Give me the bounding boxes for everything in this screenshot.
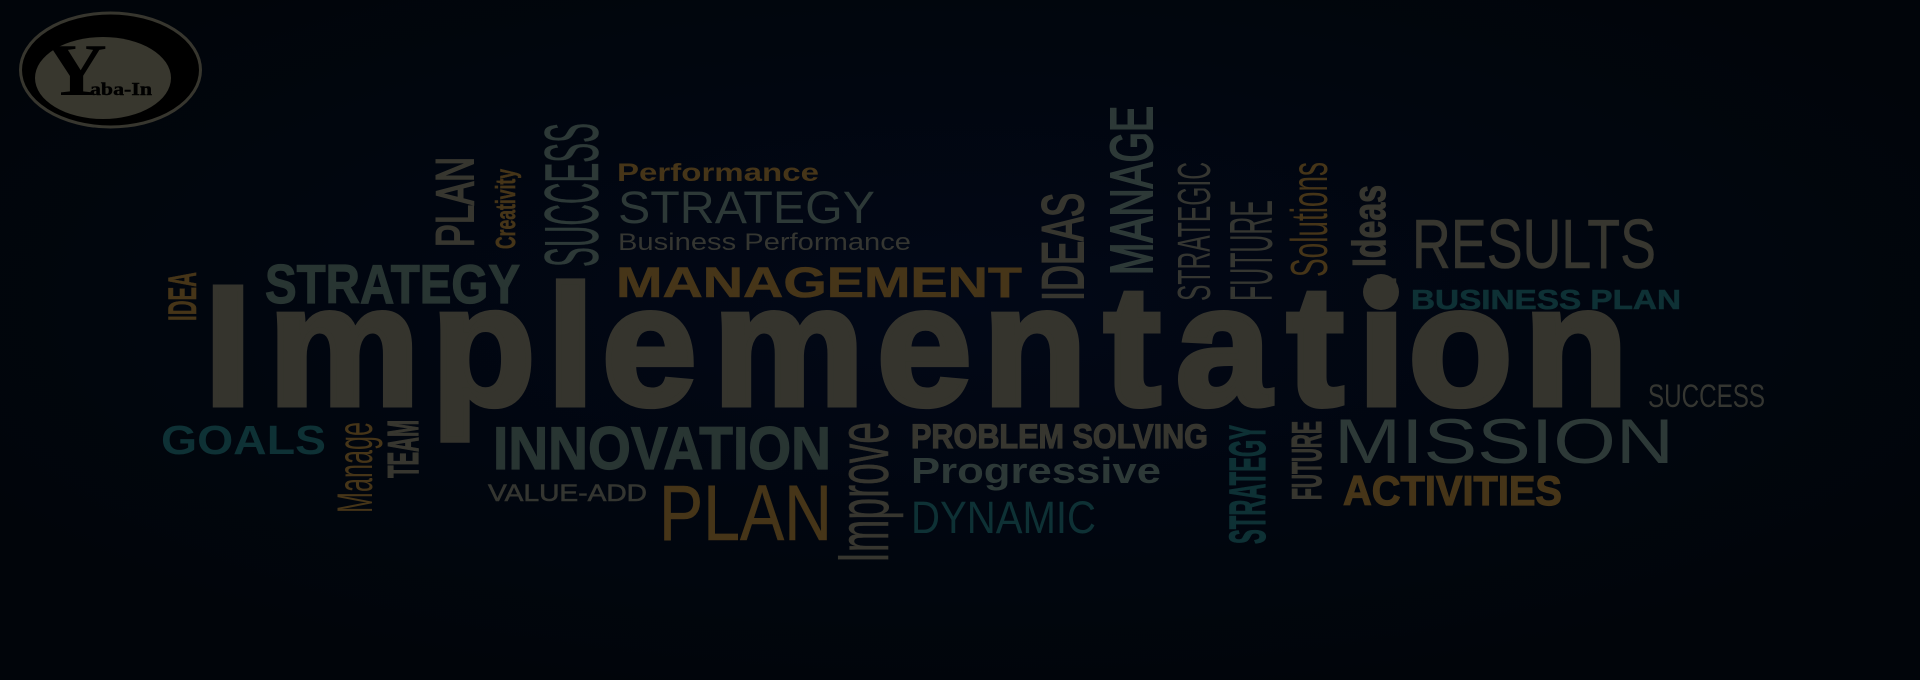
word: PLAN brown: PLAN — [659, 468, 832, 557]
word: INNOVATION: INNOVATION — [493, 415, 831, 482]
word: DYNAMIC: DYNAMIC — [911, 492, 1096, 543]
word: Improve vertical: Improve — [824, 422, 904, 563]
word: IDEA vertical: IDEA — [161, 272, 205, 321]
word: Ideas vertical: Ideas — [1343, 185, 1395, 267]
word: Progressive: Progressive — [911, 450, 1161, 491]
word: Performance: Performance — [617, 159, 819, 187]
word: BUSINESS PLAN: BUSINESS PLAN — [1411, 284, 1681, 315]
word: MISSION: MISSION — [1334, 407, 1674, 477]
word: IDEAS vertical: IDEAS — [1031, 193, 1096, 301]
logo: Yaba-In — [20, 13, 200, 127]
logo: Yaba-In: Y — [45, 30, 107, 112]
word: STRATEGY light: STRATEGY — [618, 182, 875, 233]
word: Manage vertical: Manage — [327, 422, 383, 513]
word: GOALS: GOALS — [161, 417, 326, 463]
word: ACTIVITIES: ACTIVITIES — [1343, 467, 1562, 514]
word: RESULTS: RESULTS — [1412, 205, 1656, 283]
main word: Implementation: Implementation — [204, 252, 1628, 442]
word: PROBLEM SOLVING: PROBLEM SOLVING — [911, 418, 1208, 456]
text: TEAM — [379, 420, 428, 478]
word: Solutions vertical: Solutions — [1281, 162, 1339, 277]
word: STRATEGIC vertical: STRATEGIC — [1168, 162, 1220, 301]
word: STRATEGY bold: STRATEGY — [265, 253, 520, 315]
text: FUTURE — [1283, 421, 1330, 500]
word: VALUE-ADD: VALUE-ADD — [488, 480, 647, 507]
word: PLAN vertical: PLAN — [426, 157, 485, 247]
word: MANAGEMENT: MANAGEMENT — [616, 259, 1022, 307]
word: SUCCESS right: SUCCESS — [1648, 378, 1765, 414]
logo: Yaba-In: aba-In — [90, 79, 152, 99]
text: FUTURE — [1218, 200, 1285, 301]
word: MANAGE vertical: MANAGE — [1099, 106, 1165, 275]
text: STRATEGY — [1219, 425, 1276, 544]
word: Business Performance: Business Performance — [618, 229, 911, 256]
word: Creativity vertical: Creativity — [490, 169, 521, 249]
